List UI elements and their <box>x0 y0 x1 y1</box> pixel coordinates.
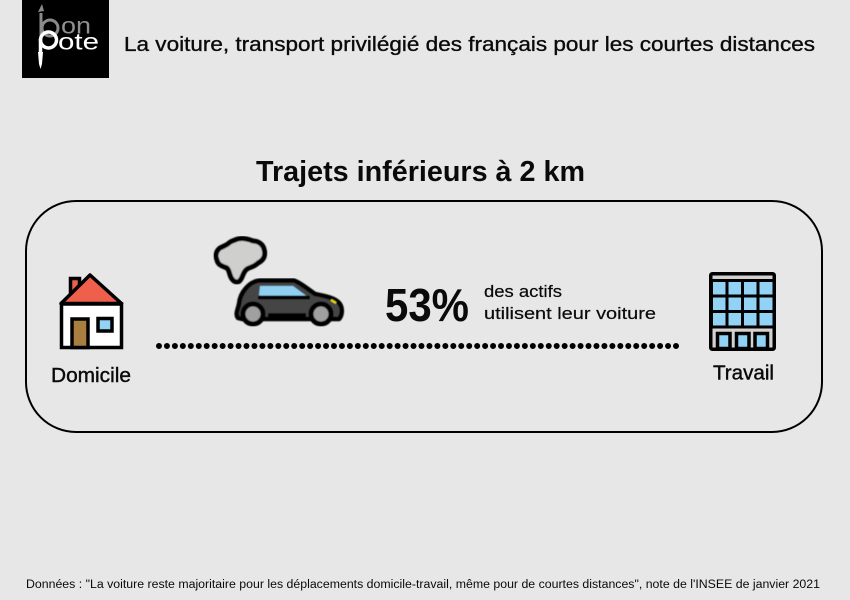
text: des actifs utilisent leur voiture: utilisent leur voiture <box>484 305 656 323</box>
logo: bon pote <box>22 0 109 78</box>
logo: bon pote: on <box>61 12 91 38</box>
icon: car <box>237 280 342 324</box>
text: des actifs utilisent leur voiture: des actifs <box>484 283 562 301</box>
title: La voiture, transport privilégié des français pour les courtes distances <box>124 33 815 56</box>
text: des actifs utilisent leur voiture <box>484 283 656 323</box>
icon: smoke cloud <box>216 238 265 282</box>
heading: trajets inférieurs à 2 km: Trajets inférieurs à 2 km <box>256 156 585 188</box>
stat: 53%: 53% <box>385 279 469 331</box>
panel: trajet domicile-travail <box>26 201 822 432</box>
icon: house <box>61 275 122 348</box>
dotted route <box>159 343 677 349</box>
label: domicile: Domicile <box>51 365 131 387</box>
source note: Données : "La voiture reste majoritaire pour les déplacements domicile-travail, même pour de courtes distances", note de l'INSEE de janvier 2021 <box>26 579 820 591</box>
label: travail: Travail <box>713 362 774 384</box>
icon: office building <box>711 274 775 349</box>
logo: bon pote: ote <box>58 28 99 54</box>
